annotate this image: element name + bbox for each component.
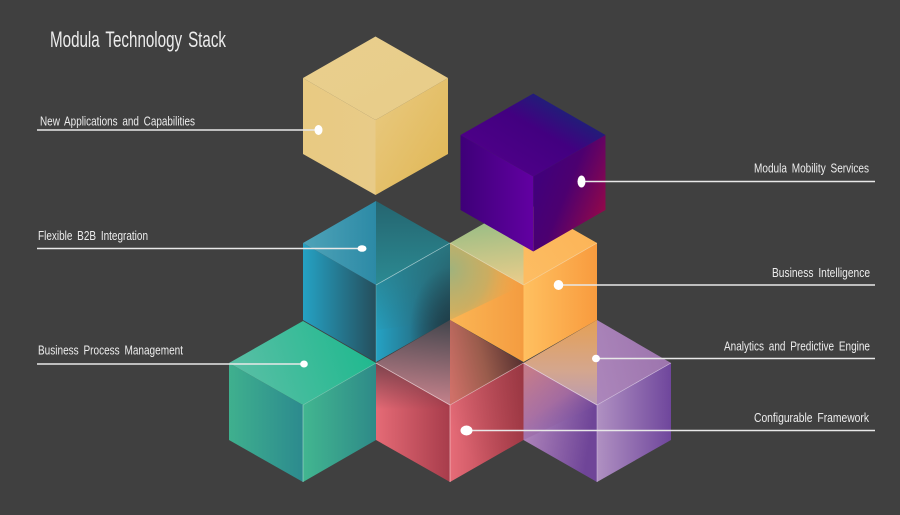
cube: green, Business Process Management xyxy=(229,321,376,482)
callout: Business Process Management: Business Process Management xyxy=(38,344,183,358)
callout: Modula Mobility Services xyxy=(578,162,875,188)
callout: Configurable Framework: Configurable Framework xyxy=(754,411,870,425)
cube: teal, Flexible B2B Integration xyxy=(303,201,450,362)
cube: red, Configurable Framework xyxy=(376,320,524,482)
cube: yellow, New Applications and Capabilities xyxy=(303,36,448,195)
callout: New Applications and Capabilities xyxy=(37,114,322,135)
callout: Business Intelligence: Business Intelligence xyxy=(772,266,870,280)
cube: light purple, Analytics and Predictive Engine xyxy=(524,320,671,482)
cube: dark purple, Modula Mobility Services xyxy=(460,94,606,252)
callout: Modula Mobility Services: Modula Mobility Services xyxy=(754,162,869,176)
callout: Business Intelligence xyxy=(554,266,875,290)
callout: Flexible B2B Integration xyxy=(37,229,366,252)
title: Modula Technology Stack xyxy=(50,27,227,52)
callout: Configurable Framework xyxy=(460,411,875,436)
callout: New Applications and Capabilities: New Applications and Capabilities xyxy=(40,114,195,128)
callout: Business Process Management xyxy=(37,344,308,368)
callout: Flexible B2B Integration: Flexible B2B Integration xyxy=(38,229,148,243)
callout: Analytics and Predictive Engine xyxy=(592,340,875,362)
cube: orange, Business Intelligence xyxy=(450,201,597,362)
